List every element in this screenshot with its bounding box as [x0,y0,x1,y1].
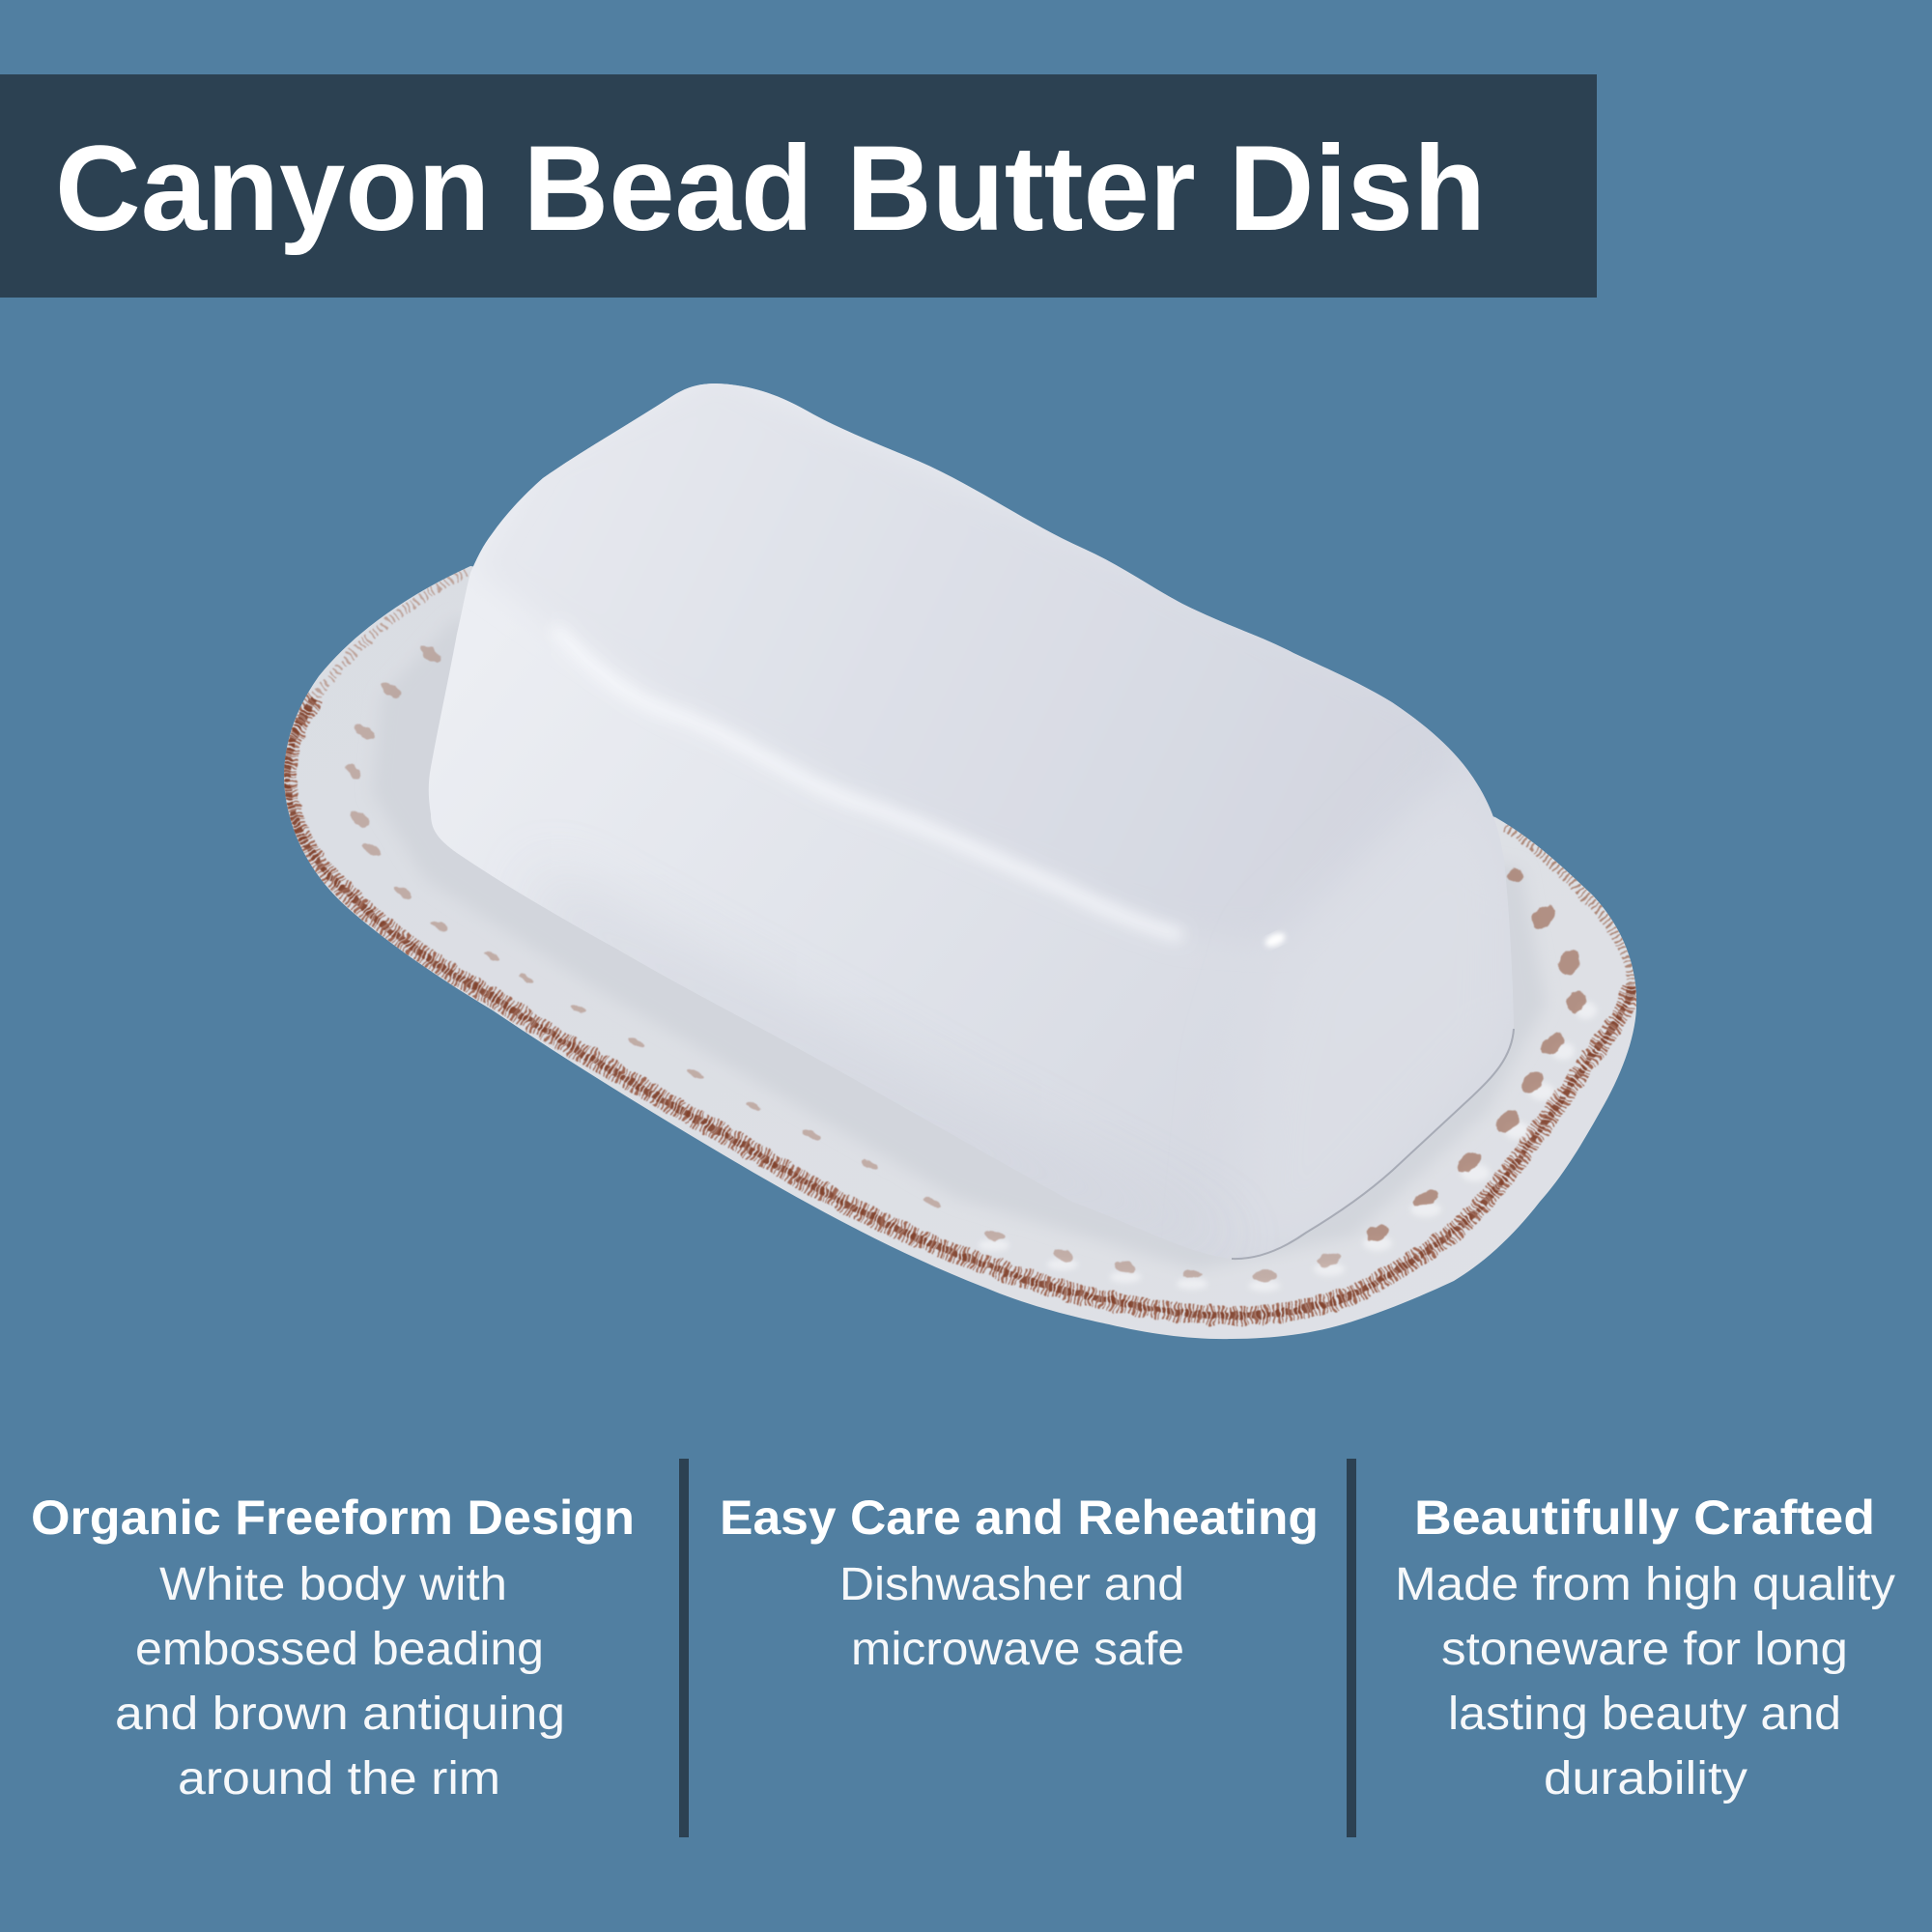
lid end face [1474,781,1493,817]
feature: beautifully crafted: stoneware for long [1441,1624,1848,1675]
feature: beautifully crafted: Beautifully Crafted [1414,1491,1875,1545]
feature: organic freeform design: Organic Freeform Design [31,1491,635,1545]
lid [429,384,1509,1221]
lid base line [1232,1029,1514,1259]
brown antiqued rim [287,573,1633,1316]
lid corner highlight [1264,931,1287,949]
feature: beautifully crafted: durability [1544,1753,1747,1804]
plate [284,566,1636,1339]
feature: organic freeform design: around the rim [178,1753,500,1804]
feature: easy care and reheating [720,1491,1319,1675]
feature: organic freeform design: and brown antiquing [115,1689,565,1740]
lid ridge highlight [554,628,1182,936]
feature: easy care and reheating: Dishwasher and [839,1559,1184,1610]
white bead highlights [979,1002,1597,1292]
feature: beautifully crafted: Made from high quality [1395,1559,1895,1610]
product image: butter dish [284,367,1636,1339]
embossed beads [343,643,1591,1282]
plate well shading [372,618,1546,1270]
lid top face [473,384,1463,763]
title: Canyon Bead Butter Dish [55,122,1486,256]
feature: easy care and reheating: microwave safe [851,1624,1184,1675]
feature: organic freeform design: White body with [159,1559,507,1610]
feature: beautifully crafted [1395,1491,1895,1804]
feature: easy care and reheating: Easy Care and Reheating [720,1491,1319,1545]
divider right [1347,1459,1356,1837]
title banner [0,74,1597,298]
feature: beautifully crafted: lasting beauty and [1448,1689,1841,1740]
lid soft shading [578,915,789,1041]
feature: organic freeform design: embossed beading [135,1624,544,1675]
divider left [679,1459,689,1837]
feature: organic freeform design [31,1491,635,1804]
